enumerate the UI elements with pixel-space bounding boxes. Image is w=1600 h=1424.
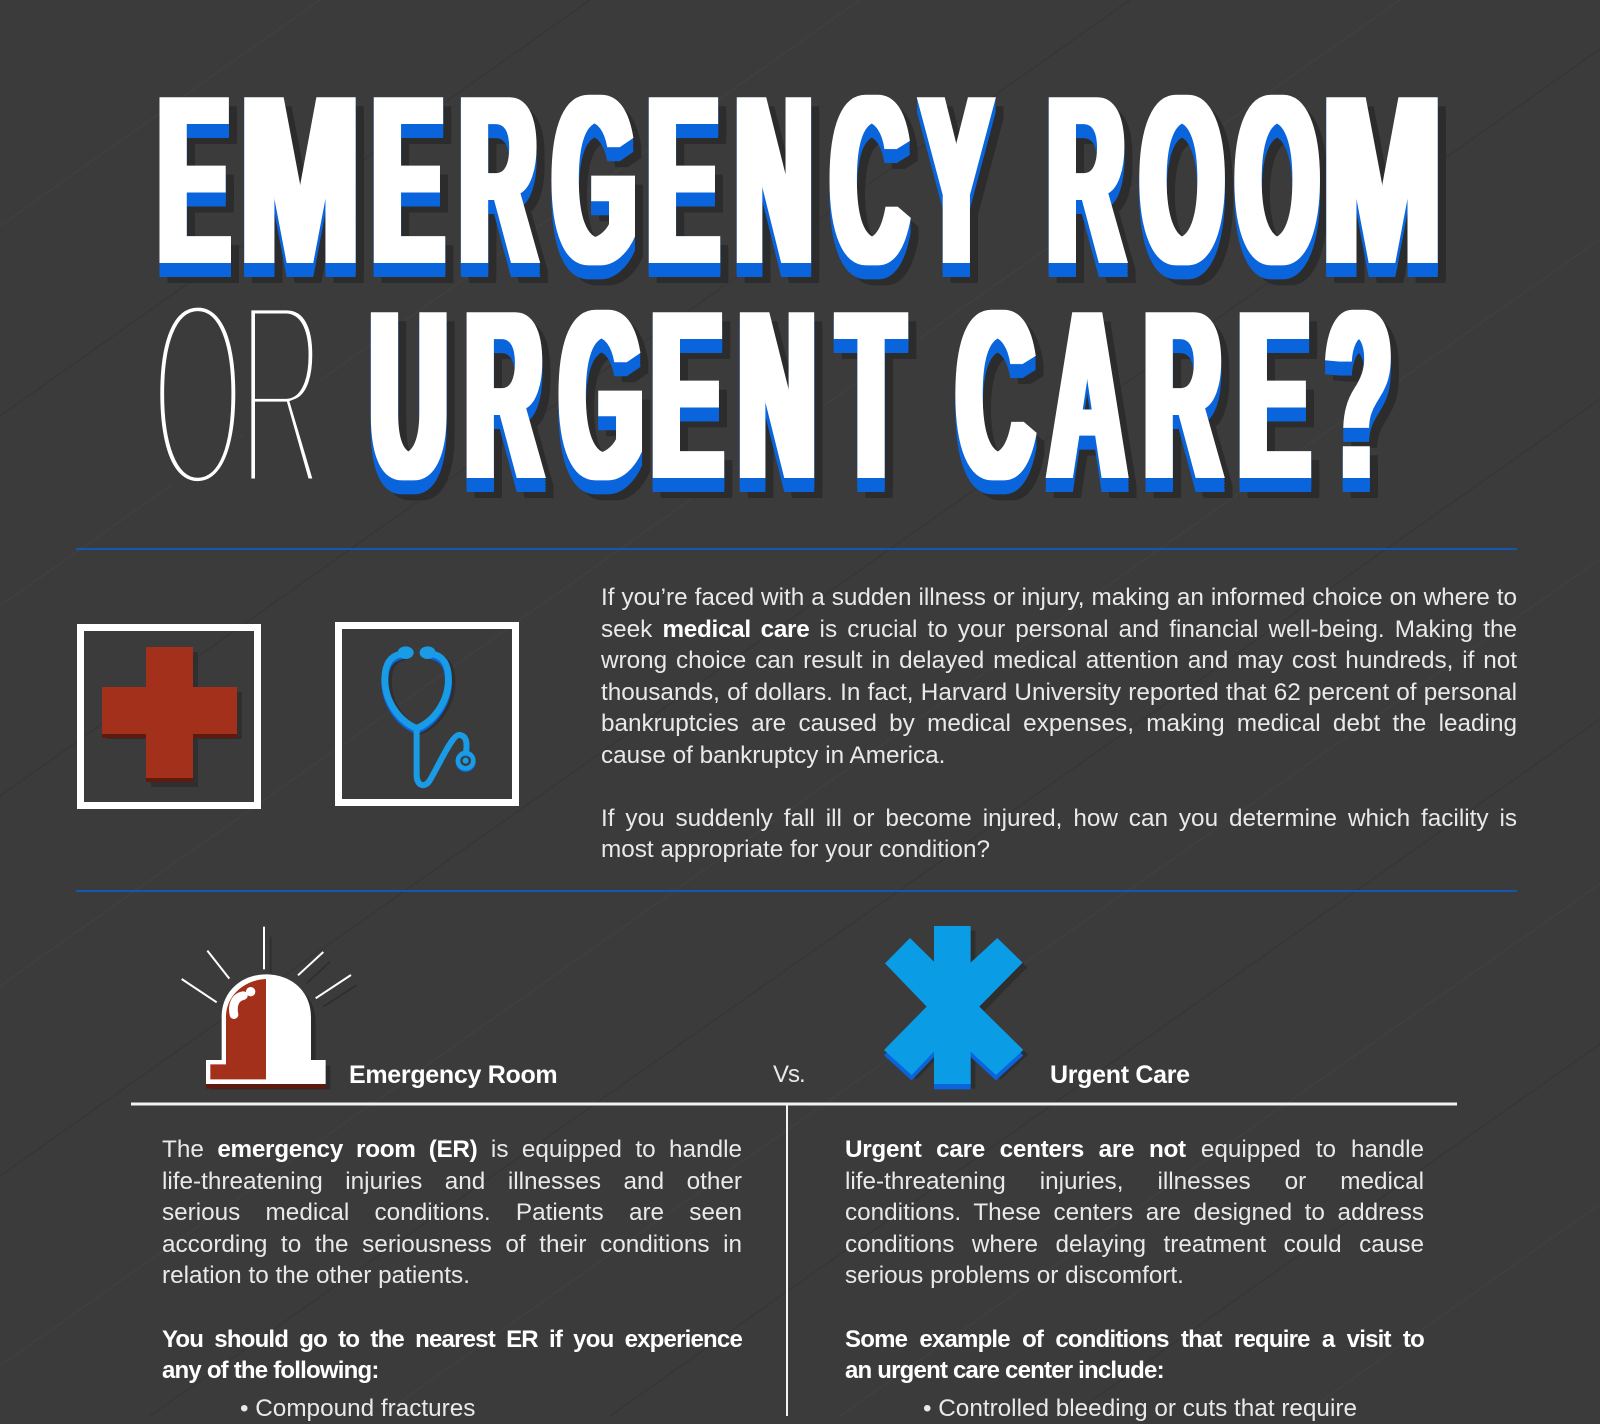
panel: urgent care text [845, 1136, 1424, 1422]
panel: urgent care text: life-threatening injuries, illnesses or medical [845, 1168, 1424, 1195]
panel: emergency room text: life-threatening injuries and illnesses and other [162, 1168, 742, 1195]
intro paragraph: bankruptcies are caused by medical expenses, making medical debt the leading [601, 710, 1517, 737]
panel: urgent care text: serious problems or discomfort. [845, 1262, 1184, 1289]
intro paragraph: If you suddenly fall ill or become injured, how can you determine which facility is [601, 804, 1517, 832]
intro paragraph: If you’re faced with a sudden illness or injury, making an informed choice on where to [601, 584, 1517, 611]
panel: urgent care text: conditions where delaying treatment could cause [845, 1231, 1424, 1258]
icon: stethoscope in white frame [338, 626, 516, 802]
panel: emergency room text: serious medical conditions. Patients are seen [162, 1199, 742, 1226]
title: URGENT CARE? [370, 261, 1391, 530]
icon: blue medical asterisk [884, 926, 1028, 1089]
label: versus: Vs. [773, 1061, 805, 1088]
title: MM [241, 45, 1441, 314]
panel: urgent care text: conditions. These centers are designed to address [845, 1199, 1424, 1226]
intro paragraph [601, 584, 1517, 863]
icon: emergency siren [182, 927, 357, 1089]
title [151, 45, 1441, 545]
panel: emergency room text: according to the seriousness of their conditions in [162, 1231, 742, 1258]
intro paragraph: seek medical care is crucial to your personal and financial well-being. Making the [601, 616, 1517, 642]
intro paragraph: most appropriate for your condition? [601, 836, 990, 863]
title: OR [151, 245, 325, 545]
title: EMERGENCY ROOM [158, 46, 1427, 315]
intro paragraph: wrong choice can result in delayed medical attention and may cost hundreds, if not [601, 647, 1517, 674]
label: emergency room: Emergency Room [349, 1061, 557, 1089]
panel: emergency room text: You should go to the nearest ER if you experience [162, 1326, 742, 1353]
intro paragraph: thousands, of dollars. In fact, Harvard University reported that 62 percent of personal [601, 678, 1517, 706]
panel: urgent care text: • Controlled bleeding or cuts that require [923, 1395, 1357, 1422]
panel: emergency room text: relation to the other patients. [162, 1262, 470, 1289]
label: urgent care: Urgent Care [1050, 1061, 1190, 1089]
icon: red cross in white frame [80, 628, 258, 806]
panel: emergency room text: The emergency room (ER) is equipped to handle [162, 1136, 742, 1163]
panel: emergency room text: • Compound fractures [240, 1395, 475, 1422]
panel: emergency room text [162, 1136, 742, 1422]
panel: urgent care text: Urgent care centers are not equipped to handle [845, 1136, 1424, 1163]
panel: urgent care text: Some example of conditions that require a visit to [845, 1326, 1424, 1353]
intro paragraph: cause of bankruptcy in America. [601, 742, 945, 768]
panel: emergency room text: any of the following: [162, 1357, 379, 1384]
panel: urgent care text: an urgent care center include: [845, 1357, 1164, 1384]
